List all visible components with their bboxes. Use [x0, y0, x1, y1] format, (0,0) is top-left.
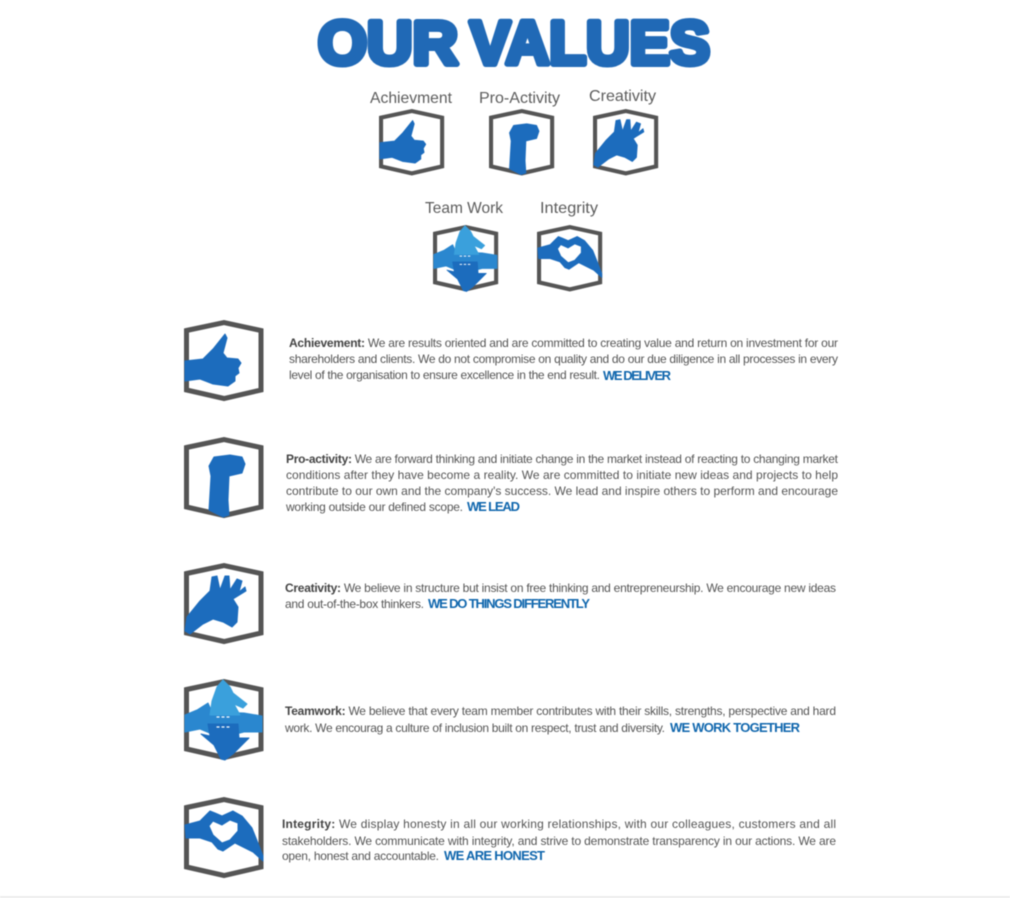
text: teamwork: Teamwork: We believe that every team member contributes with their skills, strengths, perspective and hard	[285, 704, 836, 718]
text: teamwork: work. We encourag a culture of inclusion built on respect, trust and diversity.	[284, 721, 665, 735]
text: creativity: and out-of-the-box thinkers.	[285, 597, 424, 611]
slogan: we deliver: WE DELIVER	[603, 368, 672, 383]
panel: achievement	[185, 322, 838, 398]
label: Team Work: Team Work	[425, 200, 504, 217]
panel: creativity	[185, 566, 836, 642]
text: pro-activity: Pro-activity: We are forward thinking and initiate change in the market instead of reacting to changing market	[286, 452, 839, 466]
slogan: we are honest: WE ARE HONEST	[444, 848, 545, 863]
icon: thumbs up small	[380, 111, 442, 173]
label: Integrity: Integrity	[540, 200, 598, 217]
label: Pro-Activity: Pro-Activity	[479, 90, 560, 107]
text: achievement: shareholders and clients. We do not compromise on quality and do our due diligence in all processes in every	[289, 352, 838, 366]
text: integrity: stakeholders. We communicate with integrity, and strive to demonstrate transparency in our actions. We are	[282, 834, 836, 848]
label: Achievment: Achievment	[370, 90, 453, 107]
icon: team hands small	[434, 226, 497, 291]
text: creativity: Creativity: We believe in structure but insist on free thinking and entrepreneurship. We encourage new ideas	[285, 581, 836, 595]
label: Creativity: Creativity	[589, 88, 656, 105]
icon: moose hand	[185, 566, 261, 642]
icon: raised fist	[186, 440, 261, 517]
text: achievement	[289, 336, 838, 383]
icon: heart hands small	[538, 227, 602, 289]
text: achievement: level of the organisation to ensure excellence in the end result.	[289, 368, 600, 382]
panel: teamwork	[185, 680, 836, 760]
text: integrity: Integrity: We display honesty in all our working relationships, with our colleagues, customers and all	[282, 817, 836, 831]
title: VALUES	[470, 9, 710, 77]
text: achievement: Achievement: We are results oriented and are committed to creating value and return on investment for our	[289, 336, 838, 350]
slogan: we lead: WE LEAD	[467, 499, 520, 514]
icon: raised fist small	[491, 111, 552, 175]
icon: team hands	[185, 680, 262, 760]
text: pro-activity: working outside our defined scope.	[285, 500, 463, 514]
text: pro-activity: conditions after they have become a reality. We are committed to initiate new ideas and projects to help	[286, 468, 838, 482]
text: pro-activity	[285, 452, 839, 514]
title: OUR	[318, 9, 458, 77]
overview icons	[370, 88, 656, 291]
icon: heart hands	[185, 800, 263, 876]
slogan: we work together: WE WORK TOGETHER	[670, 720, 801, 735]
icon: moose hand small	[594, 111, 656, 173]
text: creativity	[285, 581, 836, 611]
text: integrity: open, honest and accountable.	[282, 849, 439, 863]
title	[318, 9, 710, 77]
icon: thumbs up	[185, 322, 261, 398]
text: teamwork	[284, 704, 836, 735]
text: pro-activity: contribute to our own and the company's success. We lead and inspire others to perform and encourage	[286, 484, 838, 498]
panel: integrity	[185, 800, 836, 876]
text: integrity	[282, 817, 836, 863]
panel: pro-activity	[186, 440, 839, 517]
slogan: we do things differently: WE DO THINGS DIFFERENTLY	[428, 596, 590, 611]
